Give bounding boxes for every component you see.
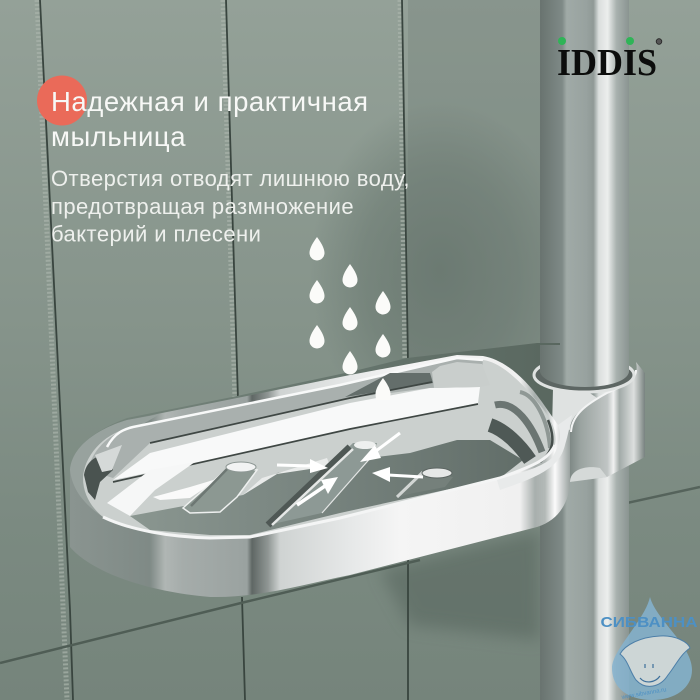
back plate shadow — [70, 343, 560, 470]
shower pole — [540, 0, 629, 700]
dish rim left — [70, 414, 160, 517]
dish neck highlight — [497, 415, 572, 490]
drain slot right — [397, 468, 453, 497]
dish front top edge — [103, 445, 555, 538]
watermark drop — [612, 597, 692, 700]
dish body — [70, 355, 570, 597]
watermark face — [640, 664, 660, 682]
white band — [113, 387, 480, 480]
arrow top right — [360, 433, 400, 462]
soap dish — [70, 355, 572, 597]
description text: бактерий и плесени — [51, 222, 261, 246]
dish dark base reflection — [130, 440, 523, 535]
arrow lower — [297, 477, 338, 505]
heading: мыльница — [51, 121, 186, 152]
left end chrome detail — [84, 455, 113, 500]
bowl right reflections — [490, 392, 552, 462]
drain slot left — [183, 462, 257, 513]
water drops — [310, 237, 390, 400]
back wall of bowl — [88, 358, 483, 478]
watermark tub — [620, 636, 690, 686]
back wall reflection — [345, 373, 433, 397]
pole clamp — [534, 345, 645, 482]
heading: Надежная и практичная — [51, 86, 369, 117]
dish inner bowl — [83, 358, 556, 538]
white bowl patches — [107, 462, 195, 516]
white rim line — [107, 358, 483, 447]
arrow right — [372, 467, 423, 482]
arrow left — [277, 459, 328, 473]
IDDIS logo: IDDIS — [557, 42, 657, 84]
description text: предотвращая размножение — [51, 194, 354, 219]
description text: Отверстия отводят лишнюю воду, — [51, 166, 410, 191]
coral accent circle — [37, 76, 87, 126]
watermark name: СИБВАННА — [600, 614, 698, 631]
clamp ring — [534, 358, 634, 392]
watermark: Sibvanna logo — [600, 597, 698, 700]
arrows — [277, 433, 423, 505]
drain slot middle — [268, 441, 377, 525]
